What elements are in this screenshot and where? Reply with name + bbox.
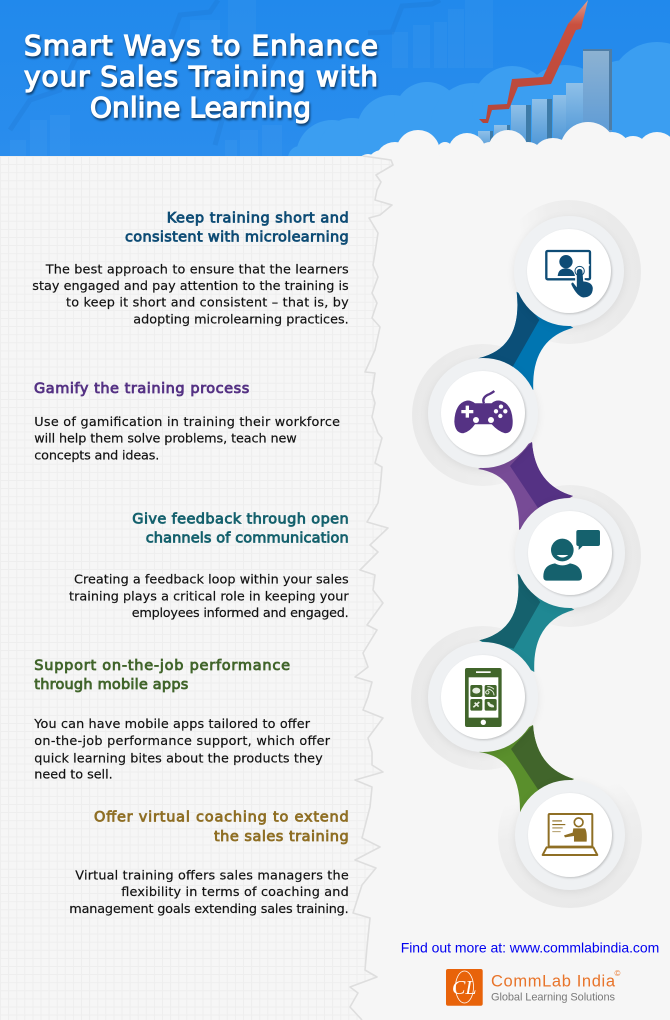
wordmark: CommLab India xyxy=(491,973,616,991)
heading: mobile apps: Support on-the-job performance xyxy=(34,658,290,674)
outer halo rings xyxy=(411,200,642,908)
body: mobile apps: need to sell. xyxy=(34,767,113,782)
connector: blue xyxy=(478,292,573,390)
heading: mobile apps xyxy=(34,658,290,693)
body: virtual coaching: flexibility in terms of coaching and xyxy=(121,885,349,900)
light blue clouds xyxy=(288,42,670,192)
title: Smart Ways to Enhance xyxy=(24,29,378,62)
heading: feedback xyxy=(132,511,349,547)
body: mobile apps: You can have mobile apps tailored to offer xyxy=(33,717,311,732)
heading: virtual coaching: Offer virtual coaching to extend xyxy=(94,810,349,826)
body: mobile apps: on-the-job performance support, which offer xyxy=(34,734,331,749)
icon: laptop with coach xyxy=(543,814,597,855)
body: gamification xyxy=(34,415,340,464)
circle: tablet touch xyxy=(514,216,624,326)
white cloud xyxy=(358,122,670,182)
body: feedback: employees informed and engaged. xyxy=(132,606,349,621)
heading: feedback: Give feedback through open xyxy=(132,511,349,527)
connector: green xyxy=(479,725,574,813)
heading: microlearning xyxy=(125,211,349,246)
heading: mobile apps: through mobile apps xyxy=(34,677,188,693)
body: microlearning xyxy=(32,262,349,327)
circle: feedback xyxy=(515,498,625,608)
header banner xyxy=(0,0,670,192)
body: feedback xyxy=(69,573,349,621)
heading: virtual coaching xyxy=(94,810,349,845)
circle: mobile app xyxy=(428,642,538,752)
copyright mark: © xyxy=(614,969,620,978)
connector: teal xyxy=(479,574,574,672)
body: mobile apps xyxy=(33,717,331,782)
title: your Sales Training with xyxy=(24,60,378,93)
heading: feedback: channels of communication xyxy=(146,531,349,547)
body: feedback: training plays a critical role in keeping your xyxy=(69,589,349,604)
text block: virtual coaching xyxy=(69,810,349,917)
text block: microlearning xyxy=(32,211,349,327)
body: microlearning: stay engaged and pay attention to the training is xyxy=(32,279,349,294)
body: microlearning: adopting microlearning practices. xyxy=(133,312,349,327)
text block: gamification xyxy=(34,381,340,464)
logo: CommLab India xyxy=(446,969,620,1006)
panel: torn grid paper xyxy=(0,156,393,1020)
body: microlearning: The best approach to ensure that the learners xyxy=(45,262,349,277)
footer link: Find out more at: www.commlabindia.com xyxy=(401,940,659,956)
title xyxy=(24,29,378,124)
circle: virtual coaching xyxy=(515,780,625,890)
icon: CL badge: CL xyxy=(452,977,476,999)
body: virtual coaching: Virtual training offers sales managers the xyxy=(75,868,349,883)
icon: game controller xyxy=(454,391,513,433)
title: Online Learning xyxy=(90,91,311,124)
connector: purple xyxy=(478,442,573,530)
body: microlearning: to keep it short and consistent – that is, by xyxy=(66,296,349,311)
tagline: Global Learning Solutions xyxy=(491,992,616,1004)
heading: virtual coaching: the sales training xyxy=(214,829,349,845)
icon: tablet with touching hand xyxy=(546,251,594,298)
body: virtual coaching: management goals extending sales training. xyxy=(69,902,349,917)
icon: CL badge xyxy=(446,969,483,1006)
body: mobile apps: quick learning bites about the products they xyxy=(34,751,323,766)
chart: rising bars xyxy=(478,49,612,151)
icon: red growth arrow xyxy=(479,0,588,123)
heading: microlearning: consistent with microlearning xyxy=(125,230,349,246)
icon: person with speech bubble xyxy=(543,530,600,581)
text block: feedback xyxy=(69,511,349,621)
body: feedback: Creating a feedback loop within your sales xyxy=(74,573,349,588)
icon: smartphone with apps xyxy=(465,668,502,727)
heading: gamification: Gamify the training process xyxy=(34,381,249,397)
circle: game controller xyxy=(428,358,538,468)
body: gamification: concepts and ideas. xyxy=(34,449,159,464)
body: virtual coaching xyxy=(69,868,349,917)
body: gamification: Use of gamification in training their workforce xyxy=(34,415,340,430)
text block: mobile apps xyxy=(33,658,331,782)
heading: microlearning: Keep training short and xyxy=(167,211,349,227)
body: gamification: will help them solve problems, teach new xyxy=(34,432,297,447)
